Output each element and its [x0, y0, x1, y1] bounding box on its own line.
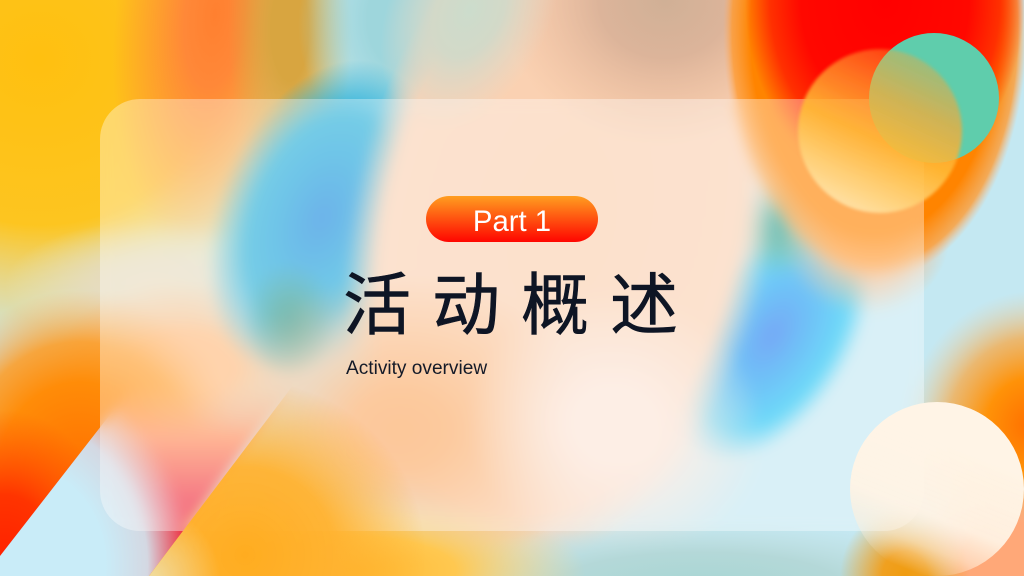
subtitle: Activity overview [346, 358, 487, 379]
badge: Part 1: Part 1 [473, 205, 551, 238]
title: 活动概述 [343, 268, 699, 344]
icon: cream circle [850, 402, 1024, 576]
icon: green circle [869, 33, 999, 163]
icon: lower left diagonal band [0, 380, 297, 576]
icon: yellow triangle [149, 380, 560, 576]
panel: frosted glass card [100, 99, 924, 531]
badge: Part 1 [426, 196, 598, 242]
icon: orange glass circle [798, 49, 962, 213]
